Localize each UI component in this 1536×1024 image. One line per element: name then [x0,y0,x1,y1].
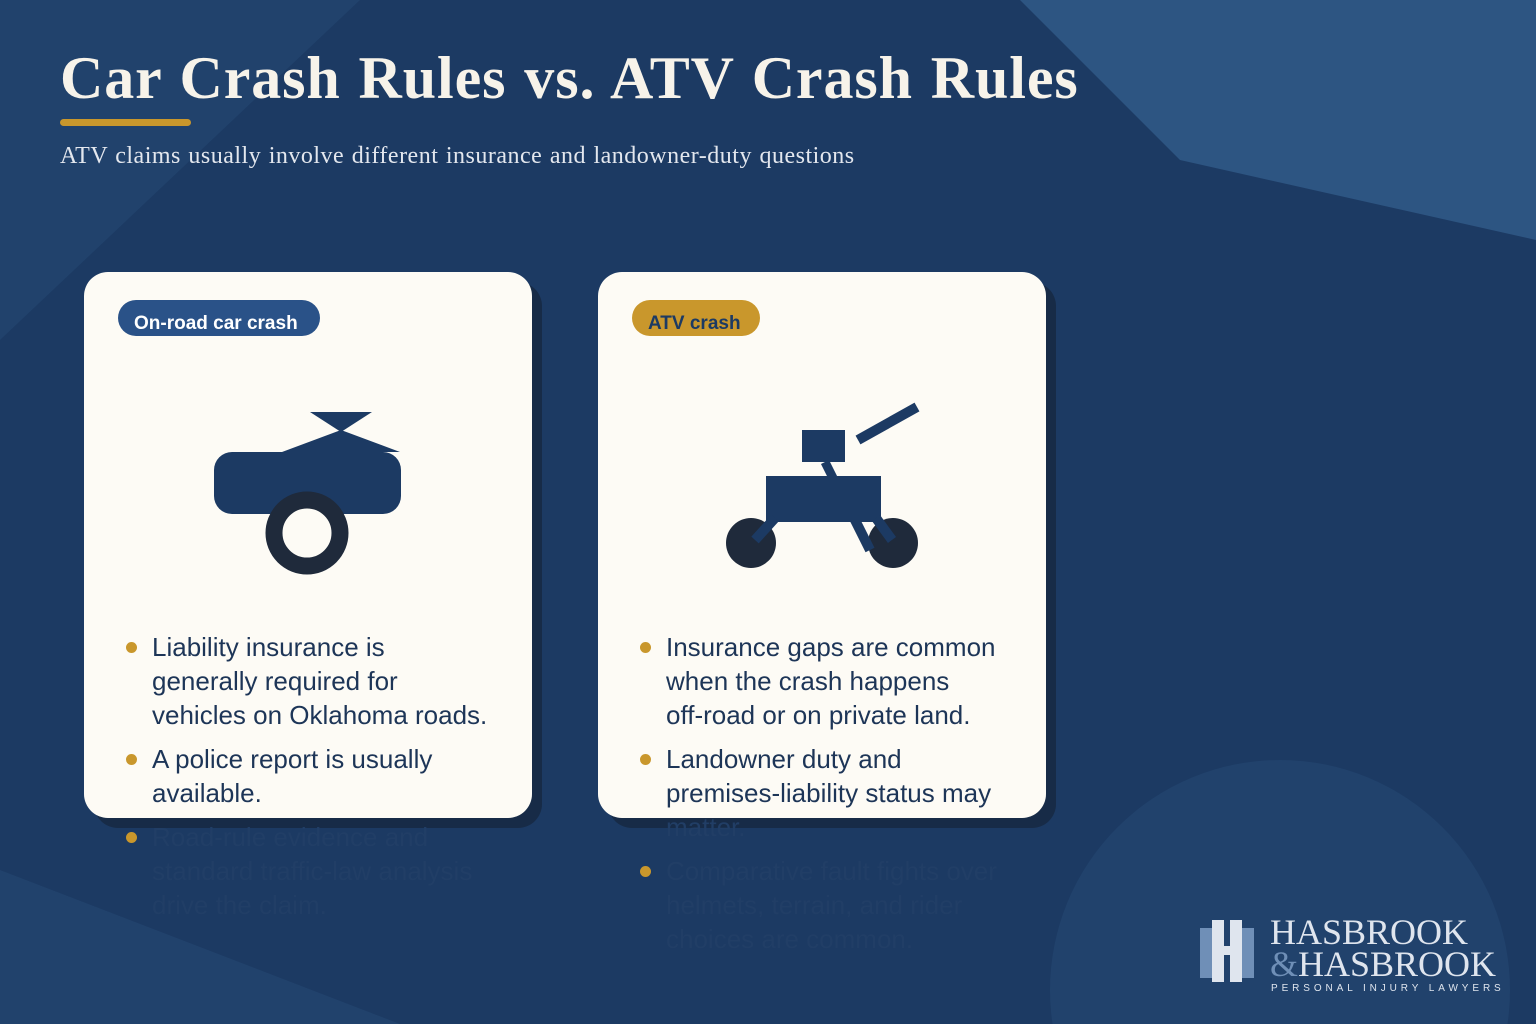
bullets: car: A police report is usually [152,744,432,774]
bullets: ATV: Landowner duty and [666,744,902,774]
overflow bullet: car [126,822,472,920]
title underline [60,119,191,126]
logo [1200,912,1505,994]
overflow bullets: ATV [640,812,997,954]
overflow bullets: ATV: choices are common. [666,924,913,954]
icon: ATV [726,402,920,568]
overflow bullets: ATV: Comparative fault fights over [666,856,997,886]
bullets: ATV: Insurance gaps are common [666,632,996,662]
bullets: car: vehicles on Oklahoma roads. [152,700,487,730]
logo: PERSONAL INJURY LAWYERS [1271,983,1505,994]
logo: HASBROOK [1270,912,1468,952]
bullets: ATV: off-road or on private land. [666,700,970,730]
icon: car [214,412,401,574]
bullets: car: available. [152,778,262,808]
tag: on-road car crash: On-road car crash [134,313,298,334]
tag: ATV crash: ATV crash [648,313,741,334]
bullets: ATV: when the crash happens [666,666,949,696]
overflow bullets: ATV: helmets, terrain, and rider [666,890,962,920]
panel: car crash [84,272,532,818]
bullets: ATV: premises-liability status may [666,778,991,808]
logo: &HASBROOK [1270,944,1496,984]
overflow bullets: ATV: matter. [666,812,745,842]
title: Car Crash Rules vs. ATV Crash Rules [60,45,1079,111]
tag: ATV crash [632,300,760,336]
overflow bullet: car: standard traffic-law analysis [152,856,472,886]
bullets: car: Liability insurance is [152,632,385,662]
subtitle: ATV claims usually involve different insurance and landowner-duty questions [60,143,855,169]
bullets: car: generally required for [152,666,398,696]
bullets: ATV [640,632,996,808]
panel: ATV crash [598,272,1046,818]
bullets: car [126,632,487,808]
overflow bullet: car: drive the claim. [152,890,327,920]
overflow bullet: car: Road-rule evidence and [152,822,428,852]
tag: on-road car crash [118,300,320,336]
